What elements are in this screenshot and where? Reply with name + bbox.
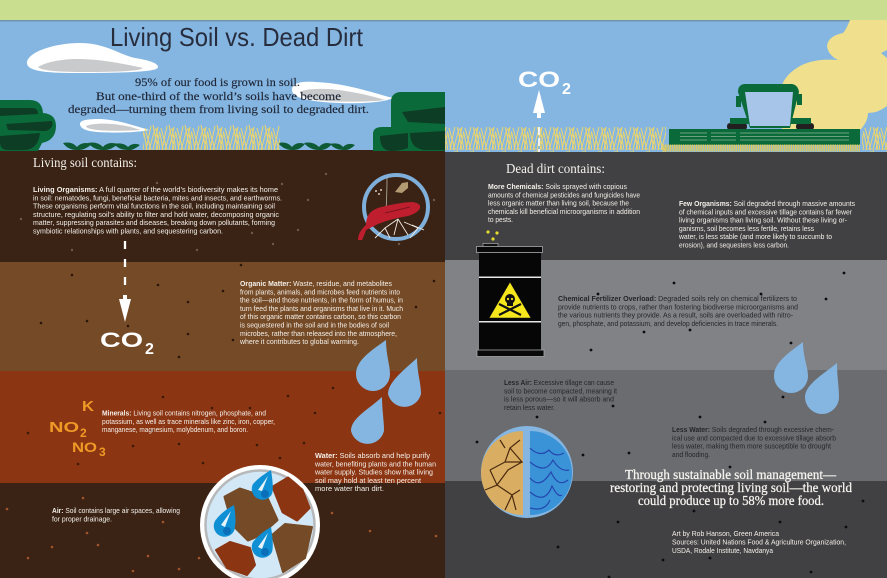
text: less water: and flooding. bbox=[672, 450, 710, 459]
left tractor bbox=[0, 100, 56, 151]
text: living organisms: structure, regulating soil’s ability to filter and hold water, decomposing organic bbox=[33, 210, 279, 219]
credits: USDA, Rodale Institute, Navdanya bbox=[672, 546, 774, 555]
CO2 label: sky: CO bbox=[518, 67, 560, 92]
text: living organisms: These organisms perform vital functions in the soil, including maintaining soil bbox=[33, 202, 275, 211]
mineral symbols: K bbox=[82, 398, 94, 415]
text: living organisms: Living Organisms: A full quarter of the world’s biodiversity makes its home bbox=[33, 185, 278, 194]
barrel with hazard symbol bbox=[476, 230, 544, 356]
intro text bbox=[68, 75, 369, 116]
text: organic matter: turn feed the plants and organisms that live in it. Much bbox=[240, 304, 403, 313]
text: chemical fertilizer overload: provide nutrients to crops, rather than fostering biodiverse microorganisms and bbox=[558, 302, 798, 311]
text: less water bbox=[672, 425, 836, 459]
text: minerals: Minerals: Living soil contains nitrogen, phosphate, and bbox=[102, 408, 266, 418]
text: organic matter: microbes, rather than released into the atmosphere, bbox=[240, 329, 397, 338]
wheat: living field bbox=[143, 125, 280, 150]
text: organic matter bbox=[239, 279, 403, 346]
mineral symbols: NO bbox=[72, 439, 97, 455]
text: chemical fertilizer overload: the various nutrients they provide. As a result, soils are overloaded with nitro- bbox=[558, 311, 794, 320]
sky bbox=[0, 20, 887, 152]
text: less air: is less porous—so it will absorb and bbox=[504, 395, 614, 404]
text: water bbox=[314, 451, 436, 493]
text: less water: Less Water: Soils degraded through excessive chem- bbox=[672, 425, 835, 434]
CO2 label: sky: 2 bbox=[562, 81, 571, 98]
text: few organisms: ganisms, soil becomes less fertile, retains less bbox=[679, 224, 814, 233]
closing statement bbox=[610, 467, 852, 508]
harvester bbox=[663, 84, 860, 148]
text: minerals: potassium, as well as trace minerals like zinc, iron, copper, bbox=[102, 417, 275, 426]
text: organic matter: of this organic matter contains carbon, so this carbon bbox=[240, 312, 401, 321]
mineral symbols: 3 bbox=[99, 445, 106, 459]
text: air bbox=[52, 506, 180, 523]
cloud: large bbox=[27, 43, 158, 73]
cloud: small bbox=[80, 119, 149, 133]
text: air: for proper drainage. bbox=[52, 514, 112, 523]
intro text: 95% of our food is grown in soil. bbox=[135, 75, 300, 89]
mineral symbols bbox=[49, 398, 106, 459]
CO2 label: soil: 2 bbox=[145, 341, 154, 358]
text: organic matter: where it contributes to global warming. bbox=[239, 337, 359, 346]
dust cloud bbox=[782, 20, 887, 130]
text: more chemicals: More Chemicals: Soils sprayed with copious bbox=[488, 182, 627, 191]
text: living organisms: matter, suppressing parasites and diseases, breaking down pollutants, forming bbox=[33, 218, 275, 227]
soil speckles bbox=[6, 173, 864, 578]
soil layers: dead dirt bbox=[445, 152, 887, 578]
CO2 label: soil: CO bbox=[100, 329, 143, 352]
text: organic matter: the soil—and those nutrients, in the form of humus, in bbox=[240, 296, 403, 305]
wheat: degraded field bbox=[445, 127, 666, 152]
text: minerals bbox=[102, 408, 275, 434]
text: less water: ical use and compacted due to excessive tillage absorb bbox=[672, 433, 836, 442]
text: few organisms: erosion), and sequesters less carbon. bbox=[679, 240, 789, 250]
text: more chemicals: less organic matter than living soil, because the bbox=[488, 199, 629, 208]
title: Living Soil vs. Dead Dirt bbox=[110, 22, 364, 52]
soil layers: living soil bbox=[0, 150, 445, 578]
text: living organisms bbox=[33, 185, 282, 236]
closing statement: could produce up to 58% more food. bbox=[638, 493, 824, 508]
seedlings bbox=[63, 142, 355, 150]
intro text: degraded—turning them from living soil to degraded dirt. bbox=[68, 102, 369, 116]
text: chemical fertilizer overload: Chemical Fertilizer Overload: Degraded soils rely on chemical fertilizers to bbox=[558, 294, 797, 303]
wheat: far right bbox=[862, 127, 887, 152]
cloud: right bbox=[292, 82, 393, 103]
credits bbox=[672, 529, 846, 555]
text: living organisms: in soil: nematodes, fungi, beneficial bacteria, mites and insects, and earthworms. bbox=[33, 193, 282, 202]
CO2 label: soil bbox=[100, 329, 154, 358]
text: water: soil may hold at least ten percent bbox=[315, 476, 421, 485]
text: more chemicals bbox=[488, 182, 640, 224]
text: few organisms: water, is less stable (and more likely to succumb to bbox=[678, 232, 832, 241]
credits: Art by Rob Hanson, Green America bbox=[672, 529, 780, 538]
closing statement: restoring and protecting living soil—the world bbox=[610, 480, 852, 495]
water drops: dead dirt bbox=[774, 342, 839, 414]
text: water: water, benefiting plants and the human bbox=[314, 459, 436, 468]
text: organic matter: is sequestered in the soil and in the bodies of soil bbox=[240, 320, 389, 330]
text: organic matter: from plants, animals, and microbes feed nutrients into bbox=[240, 287, 400, 296]
text: minerals: manganese, magnesium, molybdenum, and boron. bbox=[102, 425, 248, 434]
credits: Sources: United Nations Food & Agriculture Organization, bbox=[672, 538, 846, 546]
text: less air: retain less water. bbox=[504, 403, 555, 412]
text: water: Water: Soils absorb and help purify bbox=[315, 451, 430, 460]
text: few organisms: living organisms than living soil. Without these living or- bbox=[679, 216, 848, 225]
text: few organisms: Few Organisms: Soil degraded through massive amounts bbox=[679, 199, 855, 208]
text: chemical fertilizer overload bbox=[558, 294, 798, 328]
text: more chemicals: to pests. bbox=[488, 215, 513, 224]
text: water: more water than dirt. bbox=[315, 484, 384, 493]
heading: living soil: Living soil contains: bbox=[33, 155, 137, 170]
text: living organisms: symbiotic relationships with plants, and sequestering carbon. bbox=[33, 226, 223, 236]
icon: cracked soil vs water bbox=[481, 426, 573, 518]
text: less air bbox=[504, 378, 617, 412]
right tractor bbox=[373, 92, 445, 151]
text: more chemicals: amounts of chemical pesticides and fungicides have bbox=[488, 190, 640, 199]
CO2 label: sky bbox=[518, 67, 571, 98]
top band bbox=[0, 0, 887, 20]
icon: soil organisms bbox=[358, 175, 428, 240]
text: water: water supply. Studies show that living bbox=[314, 468, 433, 477]
CO2 rising arrow bbox=[533, 90, 545, 152]
text: more chemicals: chemicals kill beneficial microorganisms in addition bbox=[488, 207, 640, 216]
closing statement: Through sustainable soil management— bbox=[625, 467, 836, 482]
mineral symbols: 2 bbox=[80, 426, 87, 440]
text: less air: soil to become compacted, meaning it bbox=[504, 386, 617, 395]
text: less air: Less Air: Excessive tillage can cause bbox=[504, 378, 614, 387]
text: few organisms bbox=[678, 199, 855, 250]
intro text: But one-third of the world’s soils have become bbox=[96, 89, 341, 103]
heading: dead dirt: Dead dirt contains: bbox=[506, 161, 605, 176]
icon: soil particles and water bbox=[200, 465, 320, 578]
dashed arrow down bbox=[119, 241, 131, 322]
text: chemical fertilizer overload: gen, phosphate, and potassium, and develop deficiencies in trace minerals. bbox=[558, 319, 778, 328]
text: few organisms: of chemical inputs and excessive tillage contains far fewer bbox=[679, 207, 853, 216]
text: less water: less water, making them more susceptible to drought bbox=[672, 442, 831, 451]
text: organic matter: Organic Matter: Waste, residue, and metabolites bbox=[240, 279, 392, 288]
mineral symbols: NO bbox=[49, 420, 79, 436]
water drops: living soil bbox=[351, 340, 421, 444]
text: air: Air: Soil contains large air spaces, allowing bbox=[52, 506, 180, 515]
